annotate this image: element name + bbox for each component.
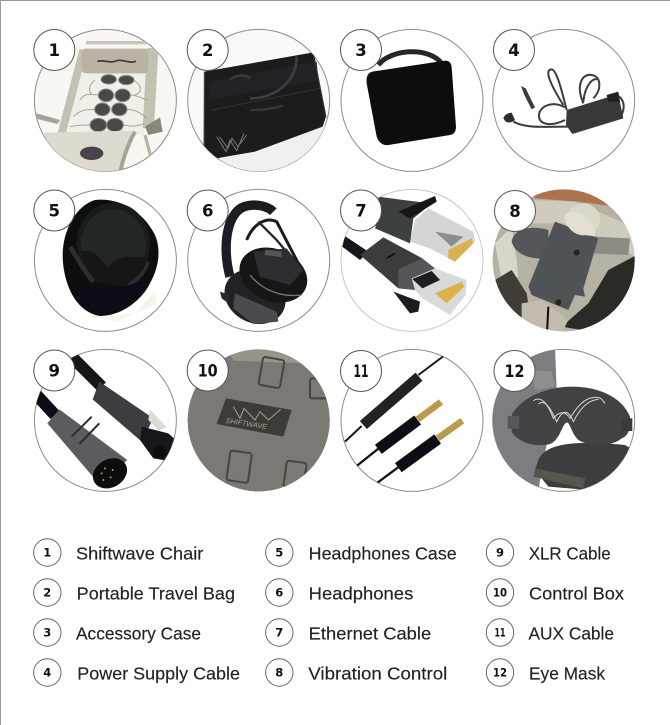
badge: 5: 5 (49, 202, 60, 220)
badge: 2 (187, 30, 228, 70)
legend item: 2 Portable Travel Bag: Portable Travel Bag (77, 583, 235, 603)
legend item: 10 Control Box: 10 (493, 586, 507, 600)
panel: aux cable (341, 349, 483, 491)
badge: 3 (340, 30, 382, 70)
legend item: 4 Power Supply Cable (34, 659, 240, 686)
panel: headphones (188, 189, 330, 334)
badge: 6 (187, 190, 228, 231)
legend item: 11 AUX Cable (486, 619, 614, 646)
legend item: 1 Shiftwave Chair: Shiftwave Chair (76, 543, 203, 563)
legend item: 2 Portable Travel Bag (34, 579, 235, 606)
badge: 10: 10 (198, 362, 218, 380)
badge: 2: 2 (202, 41, 213, 60)
legend item: 11 AUX Cable: 11 (494, 626, 506, 640)
legend item: 6 Headphones (266, 579, 414, 606)
legend item: 5 Headphones Case (266, 539, 457, 566)
legend item: 10 Control Box: Control Box (529, 583, 624, 603)
legend item: 1 Shiftwave Chair: 1 (43, 546, 51, 560)
legend item: 9 XLR Cable: XLR Cable (529, 543, 611, 563)
badge: 1 (34, 30, 75, 70)
panel: headphones case (34, 189, 176, 331)
panel: vibration control (492, 187, 638, 333)
badge: 3: 3 (355, 41, 367, 60)
legend item: 6 Headphones: Headphones (309, 583, 414, 603)
legend item: 10 Control Box (486, 579, 624, 606)
badge: 7: 7 (355, 202, 367, 220)
badge: 7 (340, 190, 382, 231)
badge: 1: 1 (49, 41, 60, 60)
legend item: 9 XLR Cable (486, 539, 611, 566)
legend item: 12 Eye Mask (486, 659, 605, 686)
legend item: 1 Shiftwave Chair (34, 539, 203, 566)
panel: ethernet cable (340, 189, 483, 331)
legend item: 4 Power Supply Cable: Power Supply Cable (77, 663, 240, 683)
badge: 11: 11 (354, 362, 368, 381)
panel: power supply cable (493, 29, 635, 171)
panel: control box: SHIFTWAVE (225, 416, 268, 431)
legend item: 5 Headphones Case: 5 (275, 546, 283, 560)
badge: 12 (494, 350, 535, 392)
legend item: 8 Vibration Control: Vibration Control (308, 663, 447, 683)
legend item: 11 AUX Cable: AUX Cable (528, 623, 614, 643)
legend item: 3 Accessory Case: Accessory Case (76, 623, 201, 643)
badge: 8: 8 (509, 202, 521, 221)
legend item: 3 Accessory Case (34, 619, 201, 646)
legend item: 4 Power Supply Cable: 4 (43, 666, 51, 680)
legend item: 3 Accessory Case: 3 (43, 626, 51, 640)
panel: xlr cable (34, 349, 176, 494)
legend item: 8 Vibration Control: 8 (275, 666, 283, 680)
badge: 9: 9 (49, 362, 60, 380)
badge: 4 (494, 30, 534, 70)
panel: accessory case (341, 29, 483, 171)
panel: eye mask (492, 347, 635, 491)
badge: 4: 4 (508, 41, 520, 60)
badge: 11 (340, 350, 382, 392)
badge: 5 (34, 190, 75, 231)
legend item: 2 Portable Travel Bag: 2 (43, 586, 51, 600)
legend item: 12 Eye Mask: Eye Mask (529, 663, 605, 683)
panel: control box (185, 347, 332, 493)
badge: 9 (34, 350, 75, 391)
legend item: 7 Ethernet Cable: 7 (275, 626, 283, 640)
badge: 12: 12 (504, 362, 524, 381)
panel: shiftwave chair (34, 29, 176, 173)
badge: 8 (494, 190, 536, 232)
legend item: 7 Ethernet Cable: Ethernet Cable (309, 623, 431, 643)
legend item: 6 Headphones: 6 (275, 586, 283, 600)
legend item: 9 XLR Cable: 9 (496, 546, 504, 560)
panel: portable travel bag (188, 29, 330, 177)
legend item: 12 Eye Mask: 12 (493, 666, 507, 680)
legend item: 7 Ethernet Cable (266, 619, 431, 646)
legend item: 8 Vibration Control (266, 659, 447, 686)
badge: 6: 6 (202, 202, 213, 220)
legend item: 5 Headphones Case: Headphones Case (309, 543, 457, 563)
badge: 10 (187, 350, 228, 391)
